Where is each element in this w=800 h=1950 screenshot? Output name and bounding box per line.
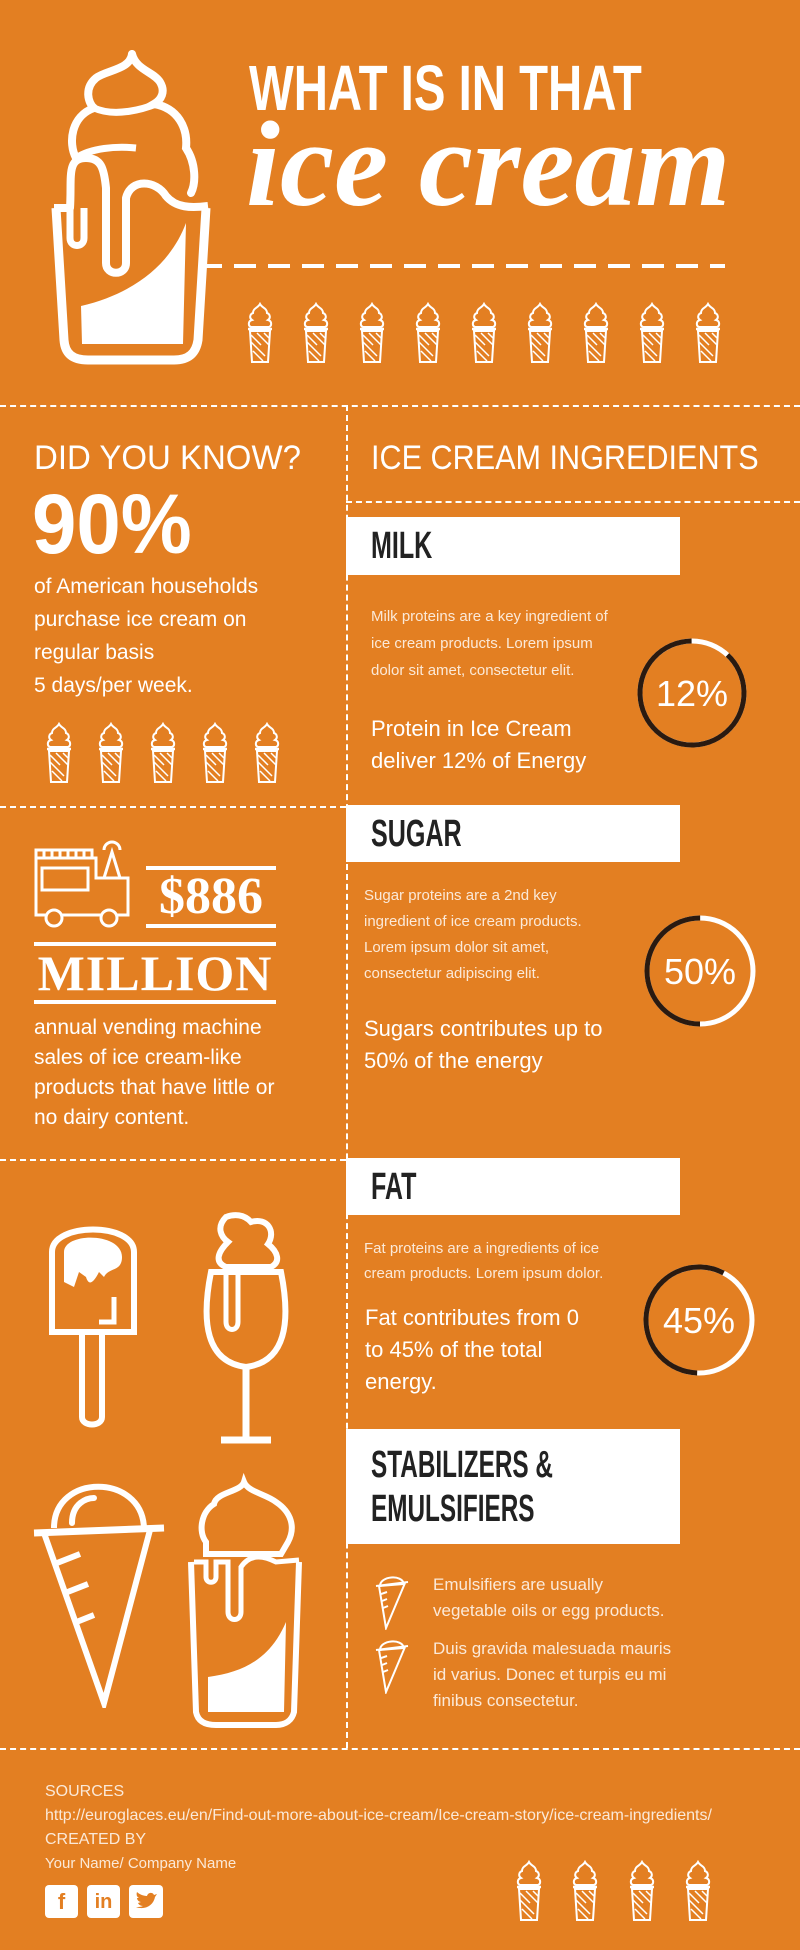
text: households: purchase ice cream on <box>34 608 246 631</box>
text: milk description: dolor sit amet, consectetur elit. <box>371 662 574 679</box>
cones row: 5 <box>46 722 280 783</box>
stat: 90%: 90% <box>32 477 192 571</box>
icon: cup <box>188 1473 302 1728</box>
text: households: of American households <box>34 575 258 598</box>
item: emulsifiers 1 <box>376 1575 665 1630</box>
box: stabilizers: STABILIZERS & <box>371 1444 553 1486</box>
item: emulsifiers 2 <box>376 1639 671 1710</box>
chart: 50% ring <box>644 916 756 1026</box>
text: households: 5 days/per week. <box>34 674 193 697</box>
footer: sources: SOURCES <box>45 1783 124 1800</box>
text: sugar description: Sugar proteins are a 2nd key <box>364 887 557 904</box>
text: fat description: Fat proteins are a ingredients of ice <box>364 1240 599 1257</box>
heading: did you know: DID YOU KNOW? <box>34 439 301 477</box>
title: what is in that: WHAT IS IN THAT <box>249 52 642 124</box>
item: emulsifiers 1: vegetable oils or egg products. <box>433 1601 665 1620</box>
text: sugar energy <box>364 1016 602 1073</box>
text: milk description: Milk proteins are a key ingredient of <box>371 608 608 625</box>
footer: social icons: in <box>95 1891 112 1913</box>
stat: $886 million with truck <box>34 840 276 1004</box>
heading: ice cream ingredients: ICE CREAM INGREDIENTS <box>371 439 759 477</box>
box: milk: MILK <box>371 525 432 567</box>
box: stabilizers: EMULSIFIERS <box>371 1488 534 1530</box>
box: sugar <box>346 805 680 862</box>
text: vending <box>34 1016 274 1129</box>
text: sugar energy: 50% of the energy <box>364 1048 543 1073</box>
footer: sources: http://euroglaces.eu/en/Find-out-more-about-ice-cream/Ice-cream-story/ice-cream-ingredients/ <box>45 1807 712 1824</box>
box: stabilizers <box>346 1429 680 1544</box>
item: emulsifiers 1: Emulsifiers are usually <box>433 1575 603 1594</box>
footer: social icons: f <box>58 1889 65 1914</box>
text: fat energy: energy. <box>365 1369 437 1394</box>
text: sugar description: consectetur adipiscing elit. <box>364 965 540 982</box>
text: $886: $886 <box>159 868 263 925</box>
box: sugar: SUGAR <box>371 813 462 855</box>
text: fat energy: to 45% of the total <box>365 1337 542 1362</box>
item: emulsifiers 2: id varius. Donec et turpis eu mi <box>433 1665 666 1684</box>
text: sugar description <box>364 887 582 982</box>
text: sugar energy: Sugars contributes up to <box>364 1016 602 1041</box>
text: vending: products that have little or <box>34 1076 274 1099</box>
text: million: MILLION <box>38 945 272 1001</box>
icon: sundae glass <box>204 1212 288 1444</box>
text: milk description: ice cream products. Lorem ipsum <box>371 635 593 652</box>
text: households: regular basis <box>34 641 154 664</box>
text: milk energy: Protein in Ice Cream <box>371 716 572 741</box>
footer: cones <box>516 1860 710 1921</box>
text: fat description: cream products. Lorem ipsum dolor. <box>364 1265 603 1282</box>
chart: 50% ring: 50% <box>664 951 736 992</box>
text: fat energy: Fat contributes from 0 <box>365 1305 579 1330</box>
box: milk <box>346 517 680 575</box>
text: vending: annual vending machine <box>34 1016 262 1039</box>
text: milk energy: deliver 12% of Energy <box>371 748 586 773</box>
header dashed line <box>206 264 725 268</box>
footer: sources: CREATED BY <box>45 1831 146 1848</box>
footer: sources: Your Name/ Company Name <box>45 1855 236 1872</box>
chart: 45% ring <box>644 1264 754 1376</box>
chart: 12% ring <box>638 638 746 748</box>
text: fat energy <box>365 1305 579 1394</box>
text: vending: no dairy content. <box>34 1106 189 1129</box>
text: households <box>34 575 258 697</box>
footer: sources <box>45 1783 712 1872</box>
chart: 45% ring: 45% <box>663 1300 735 1341</box>
icon: cone <box>34 1484 164 1708</box>
header cones row <box>248 302 720 363</box>
icon: popsicle <box>49 1226 137 1428</box>
box: fat: FAT <box>371 1166 417 1208</box>
text: sugar description: ingredient of ice cream products. <box>364 913 582 930</box>
text: fat description <box>364 1240 603 1282</box>
text: sugar description: Lorem ipsum dolor sit amet, <box>364 939 549 956</box>
icon: ice cream truck <box>34 840 130 928</box>
text: vending: sales of ice cream-like <box>34 1046 242 1069</box>
icon: header glass <box>52 50 210 364</box>
item: emulsifiers 2: finibus consectetur. <box>433 1691 579 1710</box>
footer: social icons <box>45 1885 163 1918</box>
item: emulsifiers 2: Duis gravida malesuada mauris <box>433 1639 671 1658</box>
text: milk description <box>371 608 608 679</box>
chart: 12% ring: 12% <box>656 673 728 714</box>
box: fat <box>346 1158 680 1215</box>
text: milk energy <box>371 716 586 773</box>
title: ice cream: ice cream <box>246 97 730 232</box>
